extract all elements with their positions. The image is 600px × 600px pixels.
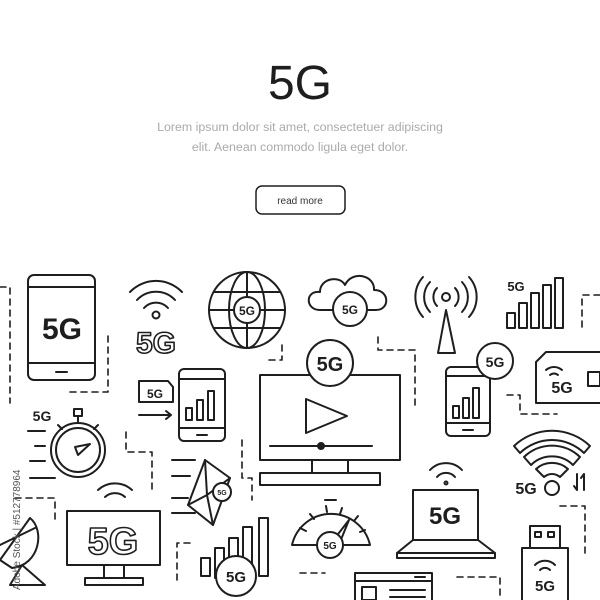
icon: signal bars with 5G circle	[201, 518, 268, 596]
icon: stopwatch: 5G	[33, 408, 51, 424]
icon: signal bars with 5G circle: 5G	[226, 569, 246, 586]
icon: SIM card right	[536, 352, 600, 403]
description text: elit. Aenean commodo ligula eget dolor.	[192, 140, 408, 154]
icon: monitor 5G: 5G	[88, 521, 138, 563]
icon: wifi with arrows: 5G	[515, 481, 537, 498]
icon: smartphone 5G: 5G	[42, 313, 82, 346]
icon: envelope 5G: 5G	[217, 490, 227, 497]
icon: phone with 5G badge: 5G	[486, 354, 504, 370]
description text: Lorem ipsum dolor sit amet, consectetuer adipiscing	[157, 120, 443, 134]
button: read more: read more	[277, 196, 323, 207]
icon: speedometer 5G	[292, 500, 370, 558]
icon: phone with bars	[179, 369, 225, 441]
icon: globe 5G	[209, 272, 285, 348]
icon: globe 5G: 5G	[239, 304, 255, 318]
icon: smartphone 5G	[28, 275, 95, 380]
description text	[157, 120, 443, 154]
icon: laptop 5G: 5G	[429, 503, 461, 530]
icon: cloud 5G	[309, 276, 386, 326]
icon: SIM card right: 5G	[551, 380, 573, 397]
watermark: stock id: Adobe Stock | #512778964	[12, 469, 23, 590]
dashed connectors	[0, 287, 600, 600]
icon: cloud 5G: 5G	[342, 303, 358, 317]
icon: wifi 5G	[130, 281, 182, 360]
icon: envelope 5G	[172, 460, 231, 525]
icon: USB modem	[522, 526, 568, 600]
icon: browser window	[355, 573, 432, 600]
icon: laptop 5G	[397, 463, 495, 558]
icon: video monitor 5G	[260, 340, 400, 485]
icon: SIM card 5G: 5G	[147, 387, 163, 401]
icon: antenna tower	[415, 277, 477, 353]
icon: monitor 5G	[67, 483, 160, 585]
icon: video monitor 5G: 5G	[317, 354, 343, 376]
icon: SIM card 5G	[139, 381, 173, 419]
icon: wifi with arrows	[514, 431, 590, 498]
icon: satellite dish	[0, 518, 45, 585]
icon: signal bars 5G	[507, 278, 563, 328]
icon: wifi 5G: 5G	[136, 327, 176, 360]
icon: stopwatch	[28, 408, 105, 478]
button: read more	[256, 186, 345, 214]
icon: phone with 5G badge	[446, 343, 513, 436]
title: 5G	[268, 57, 332, 110]
icon: speedometer 5G: 5G	[323, 541, 337, 552]
icon: signal bars 5G: 5G	[507, 279, 525, 294]
icon: USB modem: 5G	[535, 578, 555, 595]
